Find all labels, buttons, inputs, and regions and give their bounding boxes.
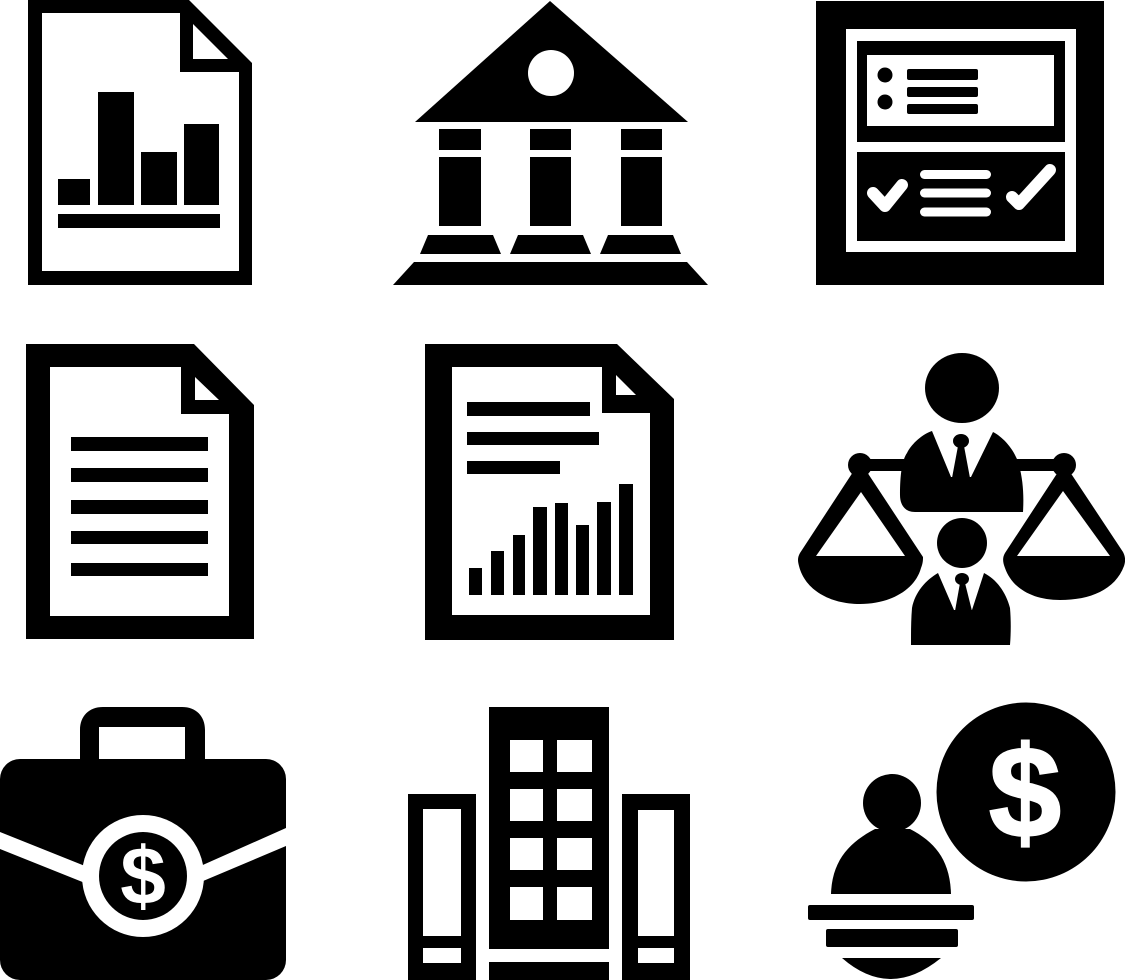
icon: report with rising bar chart bbox=[425, 344, 674, 640]
icon: text document bbox=[26, 344, 254, 639]
icon: document with bar chart bbox=[28, 0, 252, 285]
icon: scales of justice with two people bbox=[798, 353, 1125, 645]
icon: person with dollar coin bbox=[808, 702, 1116, 979]
icon: office buildings bbox=[408, 707, 690, 980]
icon: checklist panel bbox=[816, 1, 1104, 285]
icon: briefcase with dollar: $ bbox=[120, 831, 166, 922]
icon: briefcase with dollar bbox=[0, 707, 286, 980]
icon: bank building bbox=[393, 1, 708, 285]
icon: person with dollar coin: $ bbox=[989, 719, 1061, 865]
